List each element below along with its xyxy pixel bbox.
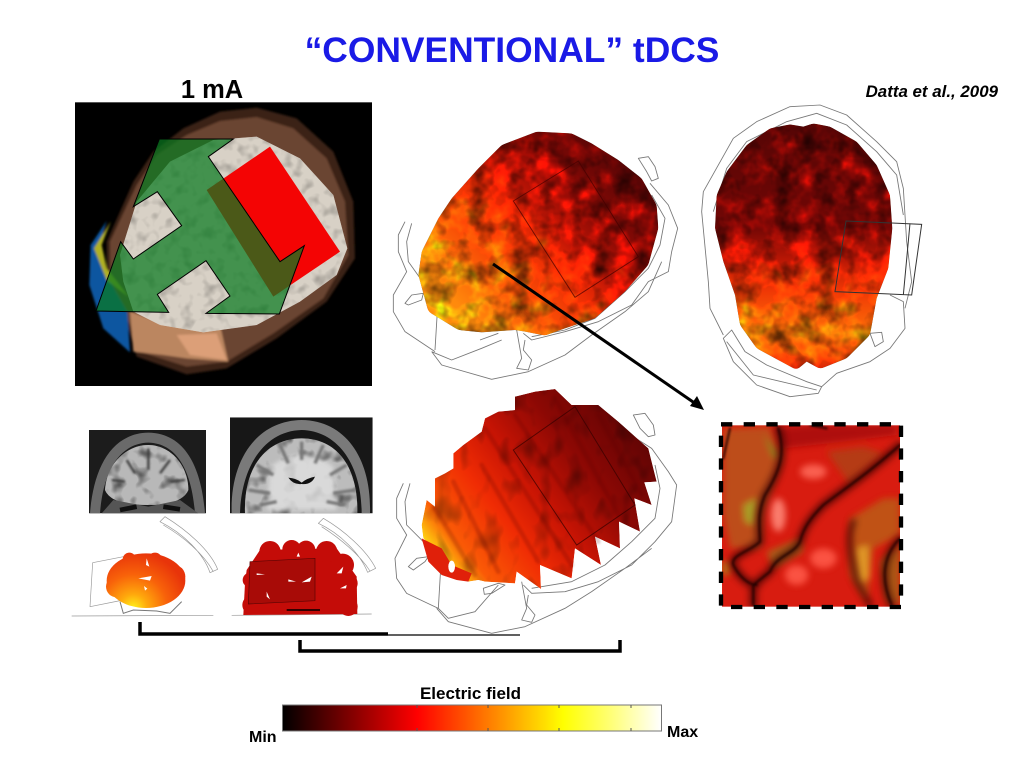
panel: brain top view	[702, 105, 922, 397]
current label: 1 mA: 1 mA	[181, 76, 243, 104]
inset sulci	[723, 425, 900, 605]
red anode electrode	[207, 147, 340, 297]
colour bar minimum label: Min	[249, 729, 277, 746]
coronal heat map left	[106, 553, 185, 608]
base structures left	[120, 602, 182, 613]
MRI slice posterior	[230, 417, 373, 513]
panel: zoomed cortex inset	[721, 424, 901, 607]
inset orange folds	[722, 425, 900, 605]
panel: head model with electrodes	[75, 102, 372, 386]
panel: coronal slices and MRI	[72, 417, 376, 616]
brain surface	[120, 137, 347, 332]
icon: yellow electrode edge	[94, 222, 128, 297]
face	[130, 312, 228, 362]
bracket long	[140, 622, 520, 635]
head: outer scalp	[107, 108, 355, 374]
electrode outline on slices	[513, 407, 635, 545]
head: inner scalp	[110, 117, 348, 367]
panel: brain lateral view	[393, 132, 678, 379]
brain surface heat map	[715, 123, 892, 370]
colour bar	[282, 705, 662, 731]
sliced brain heat map	[422, 389, 657, 589]
coronal heat map right	[242, 540, 358, 616]
colour bar label: Electric field	[420, 684, 521, 703]
head outline	[702, 105, 912, 397]
slice gaps left	[138, 558, 152, 591]
electrode outline left	[72, 517, 218, 616]
slice streaks	[435, 398, 642, 575]
brain fragment	[422, 538, 472, 582]
green arrows overlay	[96, 139, 304, 314]
head outline	[393, 157, 678, 379]
arrow to inset	[493, 264, 704, 410]
electrode outline on brain	[513, 161, 638, 297]
icon: blue rear electrode	[89, 221, 130, 352]
panel: brain sliced view	[395, 389, 677, 633]
colour bar maximum label: Max	[667, 724, 698, 741]
electrode outline on brain	[835, 221, 922, 295]
title: “CONVENTIONAL” tDCS	[305, 30, 719, 70]
MRI slice anterior	[89, 430, 206, 513]
citation: Datta et al., 2009	[866, 82, 999, 101]
brain surface heat map	[418, 132, 658, 336]
electrode outline right	[232, 518, 376, 615]
inset dashed border	[721, 424, 901, 607]
head outline	[395, 413, 677, 633]
bracket short	[300, 640, 620, 651]
inset sulci shading	[733, 428, 900, 605]
